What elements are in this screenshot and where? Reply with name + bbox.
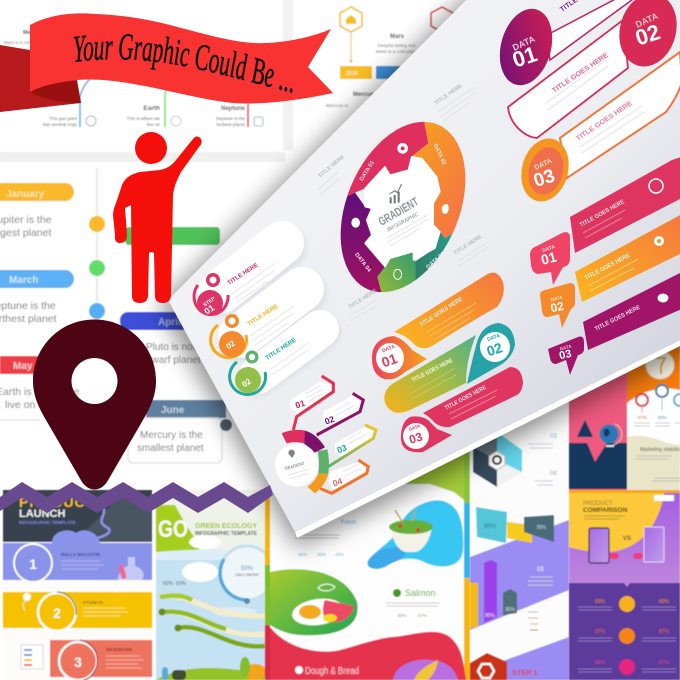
badge: step 1: STEP 1 [512, 668, 538, 677]
ring callout titles [317, 83, 488, 321]
panel: monthly timeline: January [6, 189, 45, 200]
step 3: 3 [74, 654, 82, 670]
panel: isometric stripes: 03 [550, 434, 557, 440]
bar: data 01 flag [530, 156, 680, 285]
panel: food infographic: 30% [298, 552, 307, 557]
ribbon front [30, 13, 333, 103]
panel: monthly timeline: March [9, 275, 38, 286]
step 1 [14, 544, 104, 582]
data 03 pill: 03 [407, 429, 425, 447]
card: data 01 blob [492, 0, 640, 91]
label: Salmon: 30% [397, 613, 407, 618]
panel: monthly timeline: Mercury is the [140, 430, 203, 441]
icon: location markers [634, 385, 680, 426]
icon: phones [589, 527, 664, 563]
icons: comparison circles: 93% [595, 599, 606, 605]
heading: product launch: INFOGRAPHIC TEMPLATE [19, 520, 76, 525]
ribbon inner fold [30, 80, 81, 103]
icons: comparison circles: 56% [595, 660, 606, 666]
zigzag band [0, 482, 273, 513]
ring segments [282, 430, 307, 444]
panel: top planet row: Mars is a cold [4, 40, 32, 45]
label: Dough and Bread [295, 666, 359, 677]
step 2 [38, 592, 128, 631]
bar: data 01 flag: DATA [541, 244, 556, 254]
bar: data 02 flag [540, 213, 680, 328]
panel: top planet row: live on [147, 122, 160, 127]
icons: comparison circles: 60% [659, 599, 670, 605]
food: green blob and plate [270, 569, 358, 635]
chart: 50% ring [220, 546, 274, 604]
chart: 50% ring: DAILY WATER [235, 573, 259, 577]
ring center title [376, 184, 428, 246]
segment: data 04 [377, 252, 416, 292]
icon: location markers: 47% [637, 415, 647, 420]
icon: globe [600, 424, 622, 447]
label: Salmon: Salmon [405, 588, 436, 598]
step 01: STEP [202, 296, 217, 308]
icons: comparison circles: 37% [595, 629, 606, 635]
data 03 pill [401, 367, 523, 452]
shadow of main sheet [160, 0, 680, 548]
label card 03: 03 [336, 442, 348, 455]
chart: 50% ring: 50% [241, 566, 254, 572]
comparison heading [583, 495, 674, 519]
panel: monthly timeline: dwarf planet [146, 355, 201, 366]
panel: top planet row: has several rings [43, 122, 78, 127]
data 03 pill: TITLE GOES HERE [444, 385, 488, 412]
panel: timeline top right: Mars [390, 34, 405, 40]
ring icons [351, 143, 449, 279]
step 3 [59, 640, 144, 680]
data 02 pill: DATA [486, 333, 501, 343]
label: Salmon: 47% [417, 613, 427, 618]
step cards [194, 243, 322, 395]
chart: bars: 35% [505, 607, 516, 613]
heading: product launch: PRODUCT [19, 494, 95, 510]
panel: green ecology: 60% [163, 581, 174, 587]
label: Dough and Bread: Dough & Bread [305, 666, 359, 677]
panel: monthly timeline: April [158, 317, 181, 328]
heading: green ecology: GREEN ECOLOGY [195, 523, 257, 530]
chart: hexagon [473, 432, 522, 487]
ring labels: DATA 04 [353, 252, 372, 274]
heading: product launch: LAUNCH [19, 508, 65, 520]
chart: cards: 78% [536, 525, 547, 531]
bar: data 02 flag: 02 [549, 299, 565, 315]
panel: product launch [3, 490, 152, 680]
step 1: 1 [29, 556, 37, 572]
panel: top planet row: This gas giant [49, 116, 78, 121]
step 02: TITLE HERE [247, 304, 279, 328]
panel: top planet row: farthest planet [216, 122, 246, 127]
ring callout titles: TITLE HERE [434, 83, 464, 107]
step 03: TITLE HERE [265, 338, 297, 362]
bar: data 03 flag: TITLE GOES HERE [594, 305, 641, 333]
step 02: 02 [224, 338, 237, 351]
panel: isometric stripes: 03 [537, 567, 544, 573]
icon: phones: VS [623, 536, 631, 542]
panel: top planet row: This is where we [126, 116, 160, 121]
ring labels [353, 143, 447, 274]
small ring with hexagon labels [275, 376, 376, 493]
ring center: GRADIENT [284, 461, 306, 471]
chart: gradient ring [340, 122, 466, 292]
label card 02: 02 [323, 414, 336, 427]
panel: monthly timeline [0, 183, 232, 463]
food: red wave [270, 627, 466, 680]
segment: data 03 [415, 232, 452, 280]
chart: cards [476, 507, 554, 543]
bar: data 03 flag [548, 271, 680, 375]
panel: monthly timeline: smallest planet [137, 443, 204, 454]
icons: comparison circles [578, 596, 676, 675]
card: data 03 blob: TITLE GOES HERE [575, 100, 634, 143]
segment: data 02 [412, 122, 466, 238]
hub [365, 157, 440, 267]
ribbon banner [0, 13, 333, 112]
panel: green ecology [156, 490, 274, 680]
food: blue blob with salad [368, 500, 463, 569]
panel: main gradient infographic sheet [168, 0, 680, 538]
panel: green ecology: 60% [176, 581, 187, 587]
card: data 01 blob: DATA [511, 34, 537, 53]
label: Salmon [386, 588, 440, 618]
card: data 02 blob: TITLE GOES HERE [551, 52, 610, 95]
icons: comparison circles: 87% [659, 629, 670, 635]
badge: step 1 [470, 653, 538, 680]
panel: food infographic: 30% [317, 552, 326, 557]
data 01 pill: DATA [381, 344, 396, 354]
ribbon title: Your Graphic Could Be ... [74, 34, 292, 94]
step 01 [194, 263, 275, 317]
segment: data 05 [340, 192, 384, 292]
data 01 pill: 01 [379, 350, 400, 370]
panel: monthly timeline: June [161, 405, 185, 416]
step 01: 01 [202, 303, 216, 317]
label card 01: 01 [294, 398, 307, 411]
step 01: TITLE HERE [227, 263, 259, 287]
panel: monthly timeline: Pluto is now a [146, 342, 209, 353]
panel: top planet row: Earth [143, 105, 160, 112]
data 02 pill: 02 [485, 339, 505, 359]
ring center title: INFOGRAPHIC [386, 212, 420, 233]
step 3: INCIDIDUNS [106, 647, 132, 652]
data 02 pill: TITLE GOES HERE [411, 358, 454, 384]
ring center title: GRADIENT [376, 194, 421, 229]
card: data 03 blob [515, 52, 680, 207]
panel: timeline top right: 2016 [346, 71, 358, 77]
icon: location markers: 30% [657, 415, 667, 420]
chart: cards: 95% [484, 524, 497, 530]
panel: timeline top right: Mercury is [326, 103, 349, 109]
chart: bars: 95% [485, 613, 496, 619]
comparison heading: COMPARISON [583, 507, 628, 514]
data 03 pill: DATA [408, 423, 422, 432]
segment: data 01 [347, 122, 428, 196]
ring labels: DATA 01 [359, 160, 376, 182]
chart: bars [470, 560, 517, 628]
data 02 pill [384, 323, 515, 413]
bar: data 03 flag: DATA [559, 343, 573, 351]
ring callout titles: TITLE HERE [348, 288, 378, 311]
panel: monthly timeline: live on [5, 399, 36, 411]
panel: timeline top right: Mars is a cold place [376, 49, 419, 55]
card: data 02 blob: DATA [634, 11, 660, 30]
panel: top planet row: Neptune is the [216, 116, 245, 121]
panel: isometric stripes [470, 420, 569, 680]
panel: isometric stripes: 04 [550, 471, 557, 477]
heading: green ecology: INFOGRAPHIC TEMPLATE [195, 531, 258, 537]
card: data 02 blob: 02 [632, 19, 663, 51]
panel: food infographic: Fresh [341, 520, 356, 526]
ring labels: DATA 02 [432, 143, 447, 166]
heading: green ecology: GO [158, 516, 188, 543]
ring labels: DATA 03 [426, 251, 446, 271]
panel: timeline top right [326, 7, 453, 109]
ribbon back fold [0, 45, 81, 112]
panel: food infographic: 40% [335, 552, 344, 557]
bar: data 01 flag: 01 [539, 248, 559, 268]
step 1: BULLA MALESTIE [61, 552, 100, 557]
heading: green ecology [158, 516, 258, 543]
panel: marketing statistics [569, 340, 680, 680]
heading: product launch [19, 494, 95, 525]
bar: data 02 flag: TITLE GOES HERE [584, 253, 631, 282]
ring callout titles: TITLE HERE [317, 154, 346, 180]
step 03: 02 [240, 376, 253, 389]
step 02 [211, 304, 294, 358]
step 2: STIUM 01 [83, 600, 104, 605]
icons: comparison circles: 67% [659, 660, 670, 666]
panel: monthly timeline: May [13, 361, 33, 372]
panel: timeline top right: Mercury [353, 92, 377, 98]
comparison heading: PRODUCT [583, 501, 613, 507]
card: data 03 blob: 03 [531, 166, 558, 192]
card: data 02 blob [508, 0, 680, 138]
step 03 [230, 338, 308, 395]
icon: location pin [33, 320, 156, 490]
panel: top planet row: Mars [23, 30, 36, 36]
data 01 pill [372, 273, 504, 379]
ring callout titles: TITLE HERE [453, 234, 483, 257]
panel: food infographic [265, 450, 470, 680]
data 01 pill: TITLE GOES HERE [419, 296, 464, 329]
bar: data 03 flag: 03 [558, 348, 573, 362]
icon: person waving [113, 132, 202, 303]
bar: data 02 flag: DATA [550, 294, 564, 302]
panel: timeline top right: Despite being red, [378, 43, 416, 49]
card: data 01 blob: 01 [509, 41, 540, 73]
bar: data 01 flag: TITLE GOES HERE [579, 199, 626, 229]
panel: top planet row: Neptune [221, 106, 246, 112]
card: data 03 blob: DATA [534, 158, 553, 172]
panel: top planet row [4, 30, 263, 127]
label card 04: 04 [331, 476, 344, 489]
step 2: 2 [53, 605, 61, 621]
